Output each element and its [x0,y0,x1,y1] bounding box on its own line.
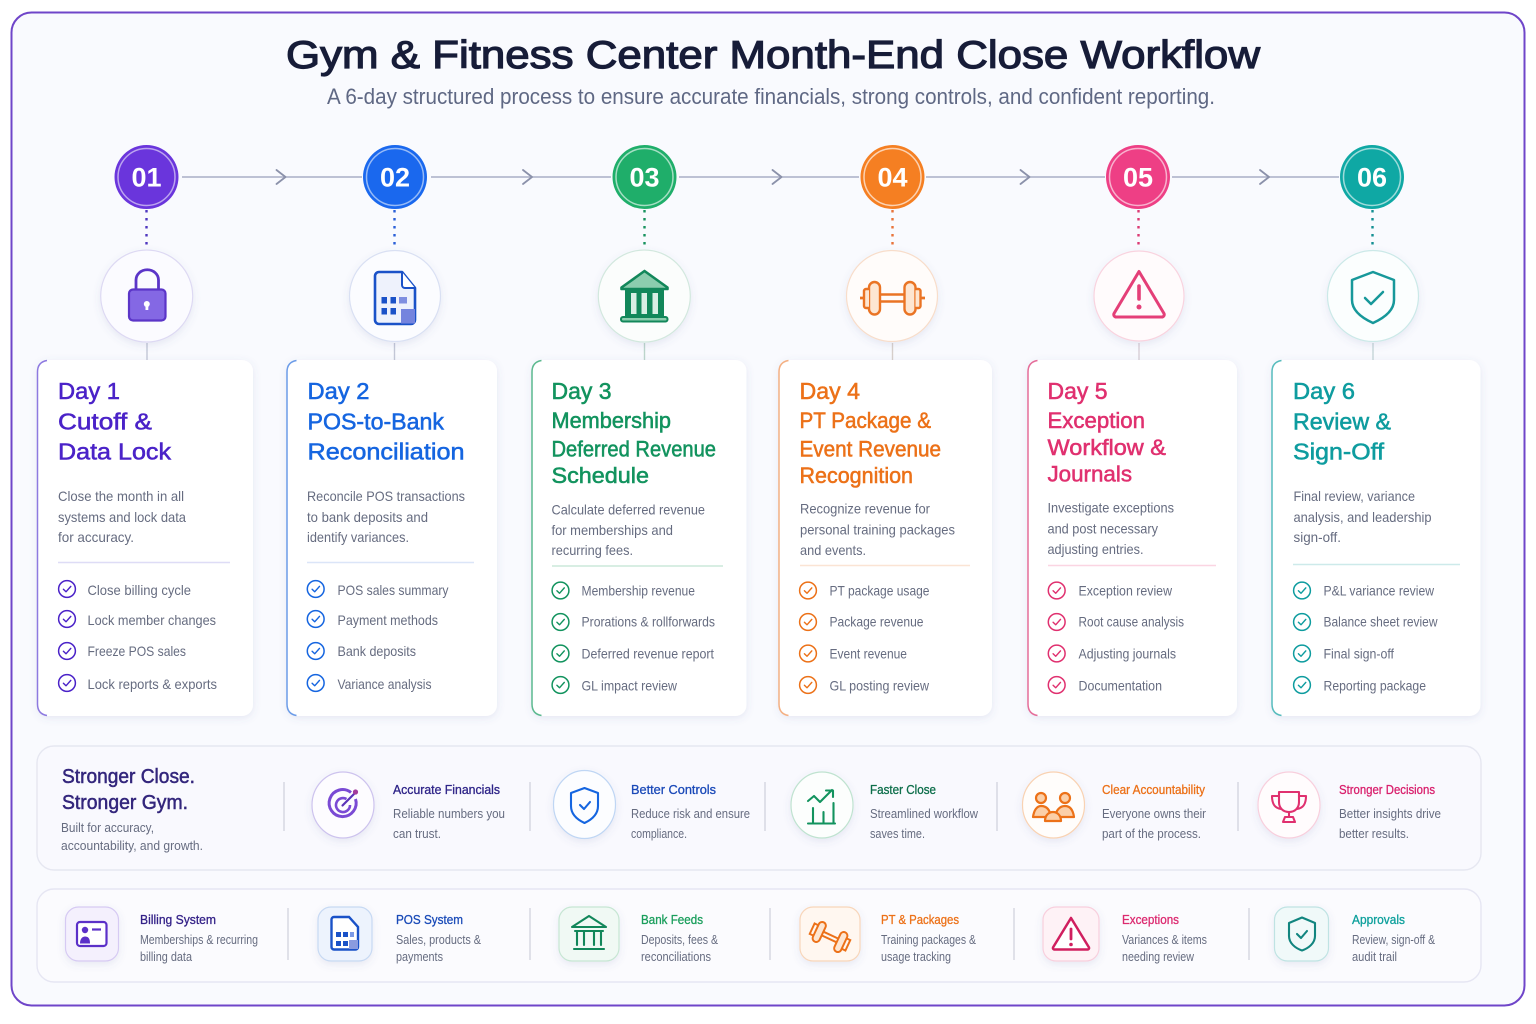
panel: Day 4 [779,360,992,716]
source: bank feeds: reconciliations [641,949,711,964]
source: exceptions: Variances & items [1122,932,1207,947]
checklist: Event revenue [830,646,907,662]
heading: Membership [552,408,671,433]
description: and post necessary [1048,520,1158,536]
benefit: faster close: Faster Close [870,782,936,797]
checklist: Freeze POS sales [88,643,186,659]
heading: Day 2 [308,378,370,404]
heading: Review & [1293,408,1391,434]
step 03 marker: 03 [629,162,660,192]
benefit: clear accountability: Clear Accountability [1102,782,1205,797]
heading: PT Package & [800,408,931,433]
description: personal training packages [800,522,955,538]
checklist [307,581,448,692]
heading: Day 1 [58,378,120,404]
heading: Day 6 [1293,378,1355,404]
description: sign-off. [1294,529,1341,545]
benefit: faster close [791,772,979,841]
benefit: clear accountability: Everyone owns their [1102,806,1207,821]
panel: Day 2 [287,360,497,716]
checklist: Variance analysis [338,676,432,692]
checklist: Membership revenue [582,582,695,598]
checklist: Adjusting journals [1078,646,1176,662]
checklist: Package revenue [830,614,924,630]
description [1294,488,1432,545]
icon badge: dumbbell [846,250,938,342]
heading: Workflow & [1048,435,1166,460]
heading: Day 4 [800,378,860,404]
panel: Day 1 [38,360,253,716]
benefit: clear accountability [1022,772,1207,841]
benefit: better controls: Reduce risk and ensure [631,806,750,821]
heading: Event Revenue [800,436,941,462]
heading: Schedule [552,463,649,488]
checklist: Payment methods [338,612,438,628]
benefit: stronger decisions [1258,772,1441,841]
step 05 marker [1106,145,1170,360]
description [552,502,705,558]
heading: Cutoff & [58,408,152,434]
checklist: GL impact review [582,678,678,694]
description: analysis, and leadership [1294,509,1432,525]
source: PT and packages: PT & Packages [881,912,959,927]
description: to bank deposits and [307,509,428,525]
benefits heading: Built for accuracy, [61,820,154,835]
step 01 marker: 01 [131,162,162,192]
description: Recognize revenue for [800,500,930,516]
source: bank feeds: Deposits, fees & [641,932,718,947]
source: POS system: POS System [396,912,463,927]
icon badge: bank [598,250,690,342]
description: adjusting entries. [1048,541,1144,557]
description: Reconcile POS transactions [307,488,465,504]
source: POS system: payments [396,949,443,964]
step 03 marker [612,145,676,360]
source: exceptions: Exceptions [1122,912,1179,927]
description: Calculate deferred revenue [552,502,705,518]
icon badge: POS document [350,250,440,342]
source: exceptions [1043,907,1207,964]
description [800,500,955,558]
heading [58,378,171,464]
step 01 marker [114,145,178,360]
heading: Day 3 [552,378,612,404]
benefit: accurate financials: Reliable numbers you [393,806,505,821]
step 02 marker [363,145,427,360]
source: billing system: billing data [140,949,193,964]
checklist: Final sign-off [1324,646,1394,662]
description [307,488,465,545]
checklist: Close billing cycle [88,582,191,598]
source: PT and packages [800,907,976,964]
icon badge: warning [1094,251,1184,341]
heading: Day 5 [1048,378,1108,404]
source: bank feeds [559,907,718,964]
description: Final review, variance [1294,488,1415,504]
description: for accuracy. [58,529,134,545]
checklist [552,582,715,694]
title: Gym & Fitness Center Month-End Close Workflow [286,34,1261,77]
description: identify variances. [307,529,409,545]
source: approvals: Review, sign-off & [1352,932,1435,947]
description: for memberships and [552,522,673,538]
step 04 marker [860,145,924,360]
checklist: Documentation [1078,678,1162,694]
source: billing system: Billing System [140,912,216,927]
checklist: Lock reports & exports [88,676,217,692]
heading: POS-to-Bank [308,408,444,434]
checklist: POS sales summary [338,582,448,598]
checklist: PT package usage [830,582,930,598]
description: and events. [800,542,866,558]
subtitle: A 6-day structured process to ensure accurate financials, strong controls, and confident reporting. [327,84,1215,109]
panel: Day 6 [1272,360,1480,716]
description: Investigate exceptions [1048,500,1174,516]
checklist: GL posting review [830,678,930,694]
checklist [800,582,930,694]
source: bank feeds: Bank Feeds [641,912,703,927]
icon badge: lock [101,250,193,342]
benefit: accurate financials: can trust. [393,826,441,841]
checklist [59,581,217,692]
timeline connector with arrows [182,170,1339,184]
checklist: Reporting package [1324,678,1426,694]
checklist: Root cause analysis [1078,614,1184,630]
heading: Sign-Off [1293,438,1384,464]
checklist: Lock member changes [88,612,216,628]
source: exceptions: needing review [1122,949,1194,964]
step 02 marker: 02 [380,162,410,192]
benefits heading [61,766,203,853]
heading: Data Lock [58,438,171,464]
description [58,488,186,545]
heading: Deferred Revenue [552,436,716,462]
heading: Reconciliation [308,438,464,464]
description: recurring fees. [552,542,633,558]
step 06 marker [1340,145,1404,360]
benefit: faster close: saves time. [870,826,925,841]
checklist: Exception review [1078,582,1173,598]
heading: Exception [1048,408,1145,433]
heading: Journals [1048,462,1132,486]
heading [552,378,716,488]
checklist: Prorations & rollforwards [582,614,715,630]
step 04 marker: 04 [877,162,908,192]
benefit: stronger decisions: better results. [1339,826,1409,841]
checklist: Balance sheet review [1324,614,1438,630]
benefit: accurate financials: Accurate Financials [393,782,500,797]
benefit: better controls: compliance. [631,826,687,841]
source: approvals [1274,907,1435,964]
heading: Recognition [800,463,913,488]
panel: data sources strip [37,889,1481,982]
source: billing system [66,907,258,964]
panel: benefits strip [37,746,1481,870]
benefit: better controls: Better Controls [631,782,716,797]
source: billing system: Memberships & recurring [140,932,258,947]
checklist: Bank deposits [338,643,416,659]
source: POS system [318,907,481,964]
panel: Day 3 [532,360,746,716]
benefit: stronger decisions: Better insights drive [1339,806,1441,821]
benefit: accurate financials [312,772,505,841]
heading [1293,378,1391,464]
benefit: better controls [554,770,750,841]
benefits heading: accountability, and growth. [61,838,203,853]
heading [800,378,941,488]
step 06 marker: 06 [1357,162,1387,192]
source: PT and packages: usage tracking [881,949,951,964]
description: Close the month in all [58,488,184,504]
source: approvals: audit trail [1352,949,1397,964]
benefit: faster close: Streamlined workflow [870,806,979,821]
panel: Day 5 [1028,360,1237,716]
checklist: P&L variance review [1324,582,1435,598]
description: systems and lock data [58,509,186,525]
benefit: clear accountability: part of the process. [1102,826,1201,841]
heading [308,378,464,464]
checklist [1294,582,1438,694]
checklist: Deferred revenue report [582,646,714,662]
source: PT and packages: Training packages & [881,932,976,947]
step 05 marker: 05 [1123,162,1153,192]
benefits heading: Stronger Close. [62,766,195,788]
heading [1048,378,1166,486]
benefit: stronger decisions: Stronger Decisions [1339,782,1435,797]
source: approvals: Approvals [1352,912,1405,927]
benefits heading: Stronger Gym. [62,792,188,814]
checklist [1048,582,1184,694]
source: POS system: Sales, products & [396,932,481,947]
description [1048,500,1174,557]
icon badge: shield [1328,250,1418,342]
